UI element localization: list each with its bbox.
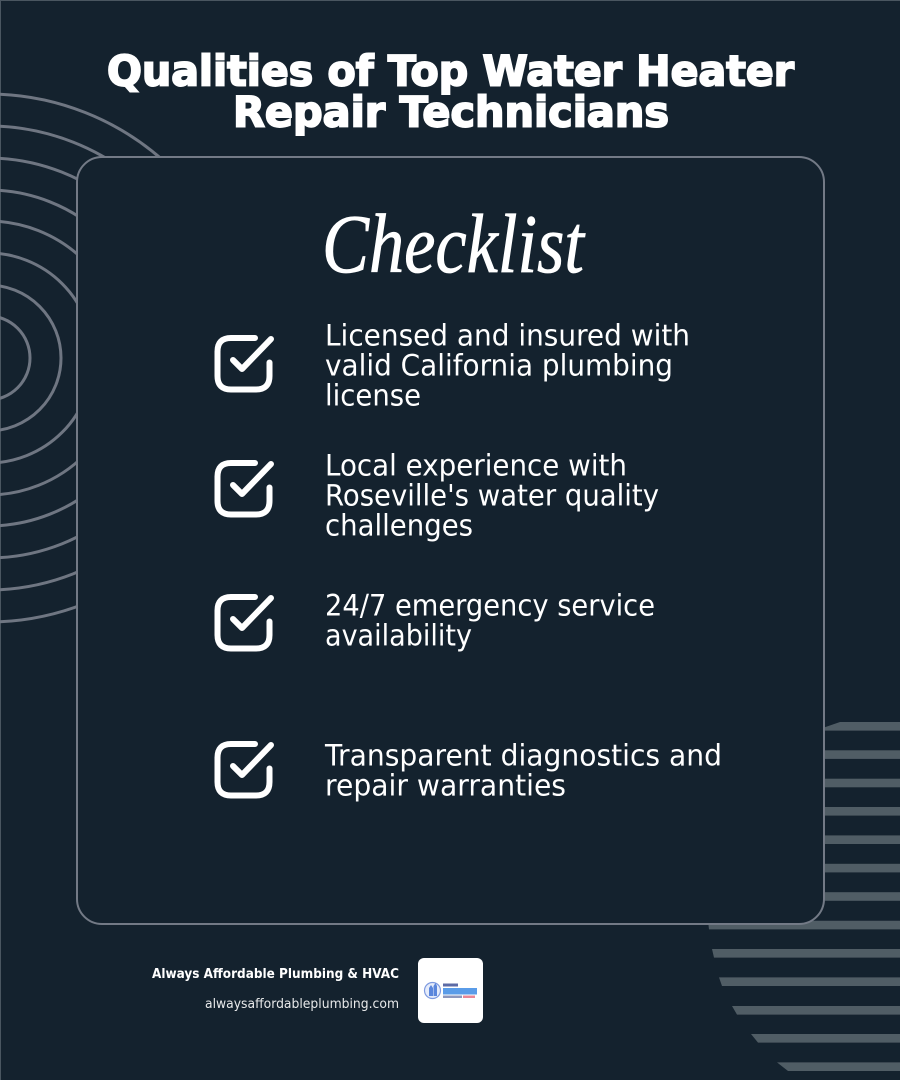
item text 4: repair warranties <box>325 768 566 802</box>
footer: company name and website: Always Affordable Plumbing & HVAC <box>152 967 399 982</box>
heading: Checklist: Checklist <box>322 198 586 291</box>
item text 1: valid California plumbing <box>325 348 673 382</box>
icon: checkbox 3 <box>218 597 271 648</box>
title: Qualities of Top Water Heater <box>107 46 794 96</box>
title <box>107 46 794 136</box>
icon: checkbox 1 <box>218 338 271 390</box>
item text 3 <box>325 588 655 652</box>
logo badge <box>418 958 483 1023</box>
panel: checklist <box>77 157 824 924</box>
decorative concentric circles <box>0 94 252 622</box>
item text 3: availability <box>325 618 472 652</box>
item text 1 <box>325 318 690 412</box>
item text 2: Roseville's water quality <box>325 478 659 512</box>
item text 3: 24/7 emergency service <box>325 588 655 622</box>
footer: company name and website <box>152 967 399 1012</box>
item text 1: license <box>325 378 421 412</box>
item text 4: Transparent diagnostics and <box>324 738 722 772</box>
item text 4 <box>324 738 722 802</box>
item text 2: Local experience with <box>325 448 627 482</box>
item text 2 <box>325 448 659 542</box>
icon: checkbox 2 <box>218 463 271 514</box>
decorative striped circle <box>708 722 900 1071</box>
footer: company name and website: alwaysaffordableplumbing.com <box>205 997 399 1012</box>
icon: checkbox 4 <box>218 744 271 796</box>
item text 1: Licensed and insured with <box>325 318 690 352</box>
title: Repair Technicians <box>233 88 669 136</box>
item text 2: challenges <box>325 508 473 542</box>
